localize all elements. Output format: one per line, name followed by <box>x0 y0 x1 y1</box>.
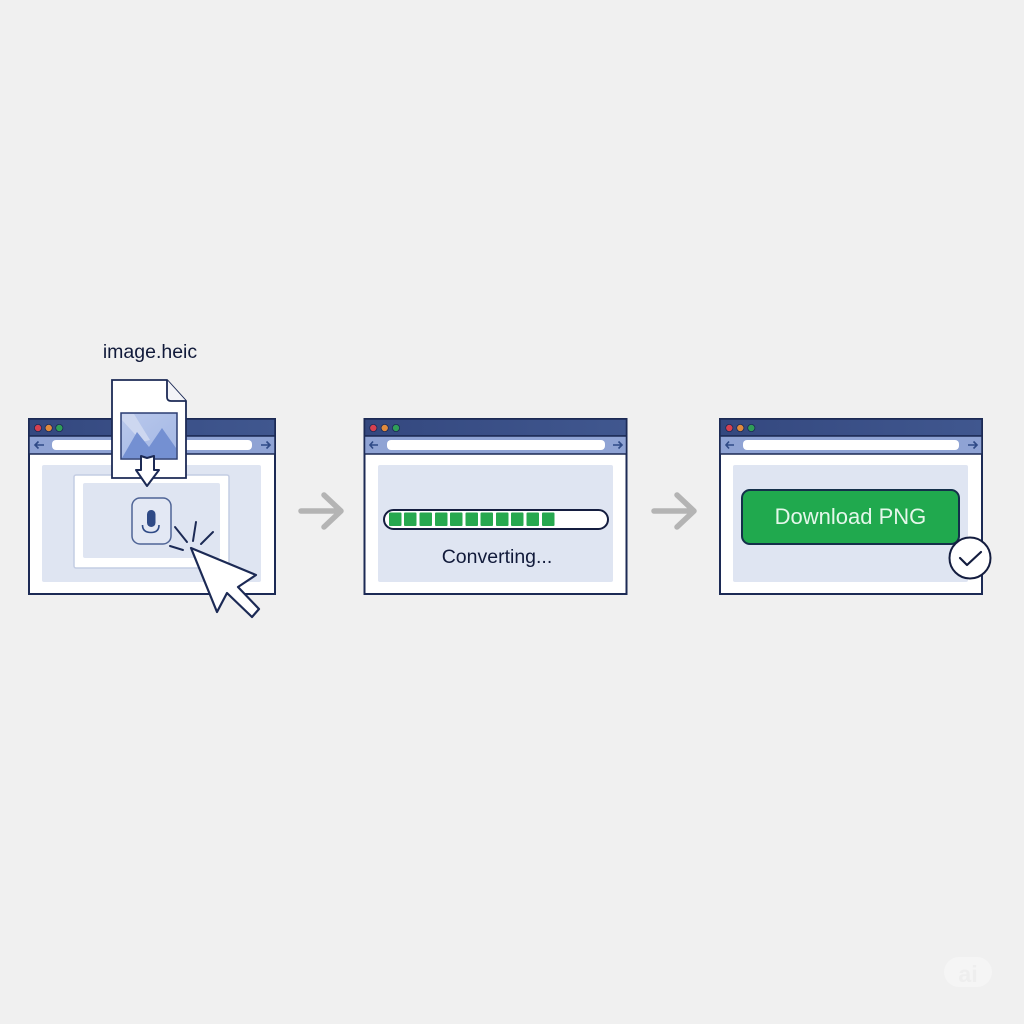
label: file name: image.heic <box>103 341 197 363</box>
forward arrow <box>968 442 977 448</box>
address bar <box>743 440 959 450</box>
window controls <box>726 424 755 432</box>
status text: Converting... <box>442 546 552 568</box>
progress bar <box>384 510 608 529</box>
window controls <box>370 424 400 432</box>
title bar <box>364 419 626 436</box>
icon: success check badge <box>950 538 990 578</box>
panel: step 1 browser window <box>29 419 275 594</box>
toolbar <box>720 436 982 454</box>
forward arrow <box>261 442 270 448</box>
title bar <box>29 419 275 436</box>
address bar <box>52 440 252 450</box>
back arrow <box>370 442 378 448</box>
content area <box>378 465 613 582</box>
watermark badge <box>944 957 992 987</box>
icon: click sparks <box>170 522 213 550</box>
picture thumbnail <box>121 413 177 459</box>
icon: mouse cursor <box>191 548 259 617</box>
panel: step 3 browser window <box>720 419 990 594</box>
arrow: step 1 to step 2 <box>301 495 341 527</box>
window controls <box>34 424 63 432</box>
icon: image.heic file <box>112 380 186 486</box>
address bar <box>387 440 605 450</box>
panel: step 2 browser window <box>364 419 626 594</box>
content area <box>733 465 968 582</box>
download button <box>742 490 959 544</box>
arrow: step 2 to step 3 <box>654 495 694 527</box>
toolbar <box>364 436 626 454</box>
watermark badge: ai <box>958 961 978 987</box>
content area <box>42 465 261 582</box>
download button: Download PNG <box>775 504 926 529</box>
forward arrow <box>613 442 622 448</box>
back arrow <box>35 442 44 448</box>
drop zone <box>74 475 229 568</box>
toolbar <box>29 436 275 454</box>
title bar <box>720 419 982 436</box>
download arrow <box>136 456 159 486</box>
icon: microphone upload button <box>132 498 171 544</box>
back arrow <box>726 442 734 448</box>
